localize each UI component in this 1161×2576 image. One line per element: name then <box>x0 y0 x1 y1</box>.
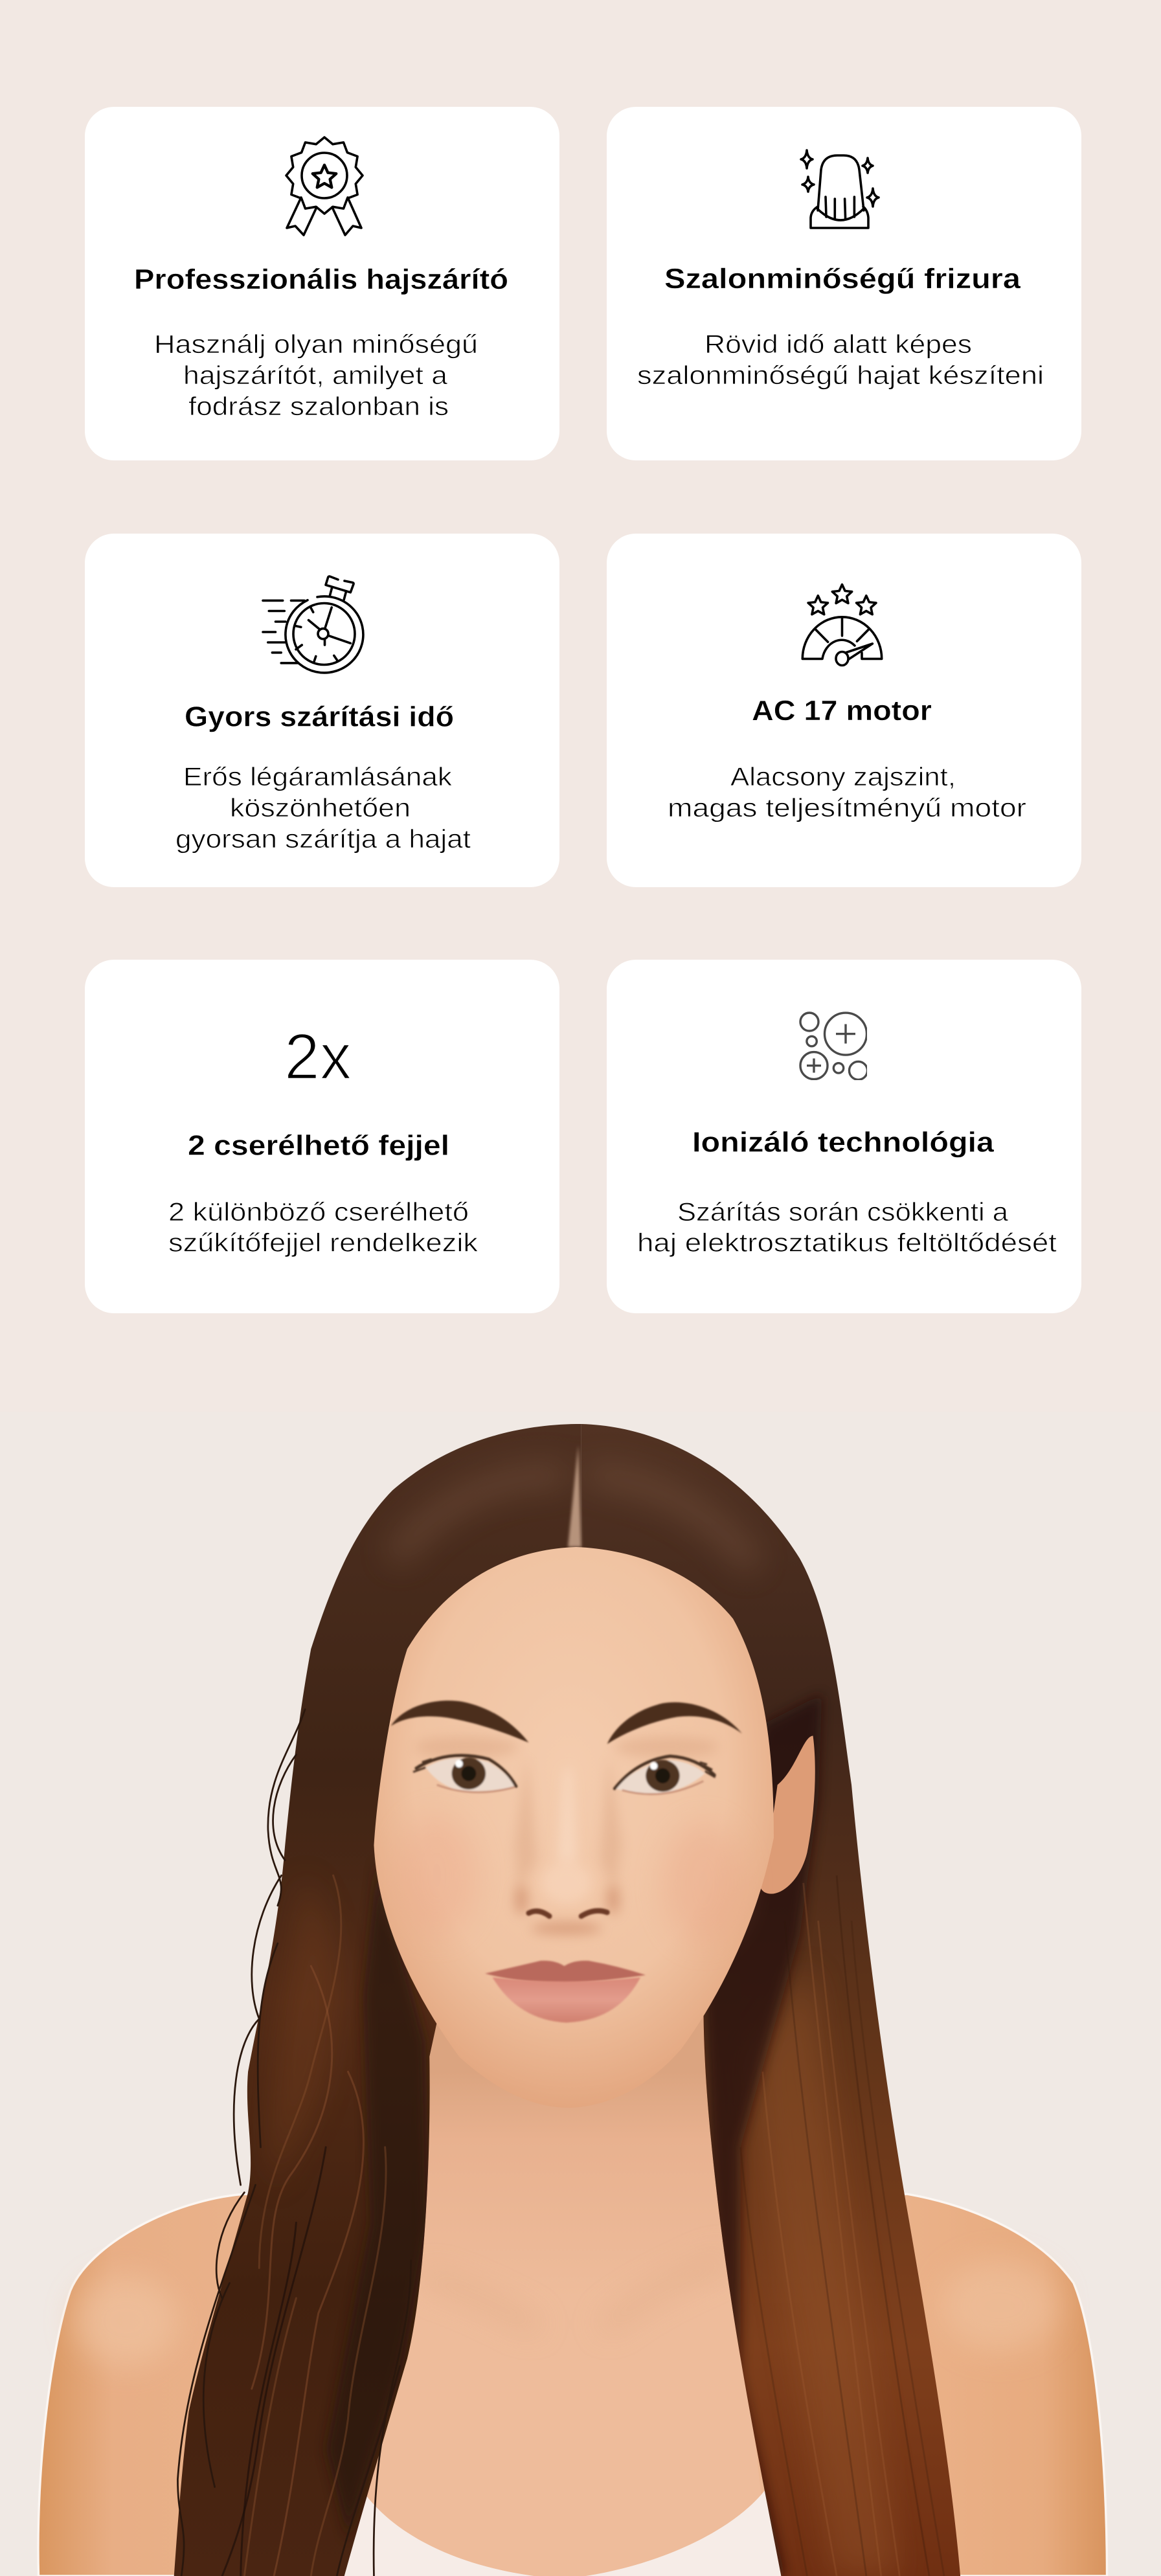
right cheek blush <box>662 1823 744 1943</box>
description <box>668 763 1026 822</box>
heading: Gyors szárítási idő <box>185 701 454 733</box>
ear <box>758 1735 815 1894</box>
heading: Ionizáló technológia <box>692 1127 995 1158</box>
left cheek blush <box>396 1815 478 1936</box>
nose shadow <box>515 1884 620 1934</box>
description: köszönhetően <box>230 794 411 822</box>
heading: AC 17 motor <box>752 695 932 727</box>
right eyebrow <box>607 1702 742 1744</box>
description: Szárítás során csökkenti a <box>677 1198 1009 1226</box>
panel: Ionizáló technológia <box>607 960 1081 1313</box>
icon: award rosette with star <box>286 137 363 235</box>
panel: Szalonminőségű frizura <box>607 107 1081 460</box>
hair parting <box>568 1445 581 1547</box>
card background <box>607 960 1081 1313</box>
icon: ion bubbles with plus signs <box>800 1013 868 1079</box>
left eyebrow <box>391 1700 528 1743</box>
card background <box>85 534 559 887</box>
heading: 2 cserélhető fejjel <box>188 1129 449 1162</box>
hair: right straight side <box>581 1424 960 2576</box>
card background <box>607 107 1081 460</box>
description: fodrász szalonban is <box>188 392 449 421</box>
panel: 2 cserélhető fejjel <box>85 960 559 1313</box>
description <box>637 330 1044 390</box>
description: 2 különböző cserélhető <box>168 1198 469 1226</box>
heading: Professzionális hajszárító <box>134 264 508 295</box>
description: szalonminőségű hajat készíteni <box>637 361 1044 390</box>
icon: speedometer with three stars <box>802 585 882 666</box>
icon: 2x text: 2x <box>284 1021 352 1093</box>
hair: loose wet strands <box>177 1710 411 2576</box>
description: hajszárítót, amilyet a <box>183 361 448 390</box>
description <box>175 763 471 853</box>
eye socket shading <box>414 1737 718 1890</box>
description: gyorsan szárítja a hajat <box>175 825 471 853</box>
heading: Szalonminőségű frizura <box>664 263 1021 295</box>
nose highlight <box>541 1770 592 1904</box>
upper lip <box>485 1961 646 1983</box>
description <box>154 330 478 421</box>
panel: AC 17 motor <box>607 534 1081 887</box>
panel: Professzionális hajszárító <box>85 107 559 460</box>
icon: shiny hair with sparkles <box>801 150 879 228</box>
hair: left wet side <box>174 1424 581 2576</box>
hair: right shading and strands <box>703 1694 944 2576</box>
icon: stopwatch with speed lines <box>263 576 363 673</box>
description <box>168 1198 479 1258</box>
hair: left shading and wavy strands <box>222 1860 429 2576</box>
photo background <box>0 1412 1161 2576</box>
shoulders and chest <box>38 2194 1107 2576</box>
right shoulder highlight <box>940 2261 1059 2351</box>
description: Erős légáramlásának <box>183 763 453 791</box>
card background <box>607 534 1081 887</box>
nostrils <box>528 1911 607 1916</box>
white top <box>344 2491 781 2576</box>
hair: crown sheen <box>400 1475 748 1558</box>
face <box>374 1547 774 2108</box>
neck <box>367 2016 717 2576</box>
description: haj elektrosztatikus feltöltődését <box>637 1229 1057 1258</box>
card background <box>85 107 559 460</box>
lower lip <box>492 1977 640 2022</box>
card background <box>85 960 559 1313</box>
description: Alacsony zajszint, <box>730 763 956 791</box>
panel: Gyors szárítási idő <box>85 534 559 887</box>
description: Használj olyan minőségű <box>154 330 478 359</box>
photo: portrait of woman with half wet, half straight hair <box>0 1412 1161 2576</box>
right eye <box>614 1756 716 1794</box>
description <box>637 1198 1057 1258</box>
collarbone shading <box>429 2261 722 2325</box>
description: Rövid idő alatt képes <box>704 330 972 359</box>
left shoulder highlight <box>74 2276 177 2366</box>
description: szűkítőfejjel rendelkezik <box>168 1229 479 1258</box>
description: magas teljesítményű motor <box>668 794 1026 822</box>
left eye <box>413 1756 516 1792</box>
